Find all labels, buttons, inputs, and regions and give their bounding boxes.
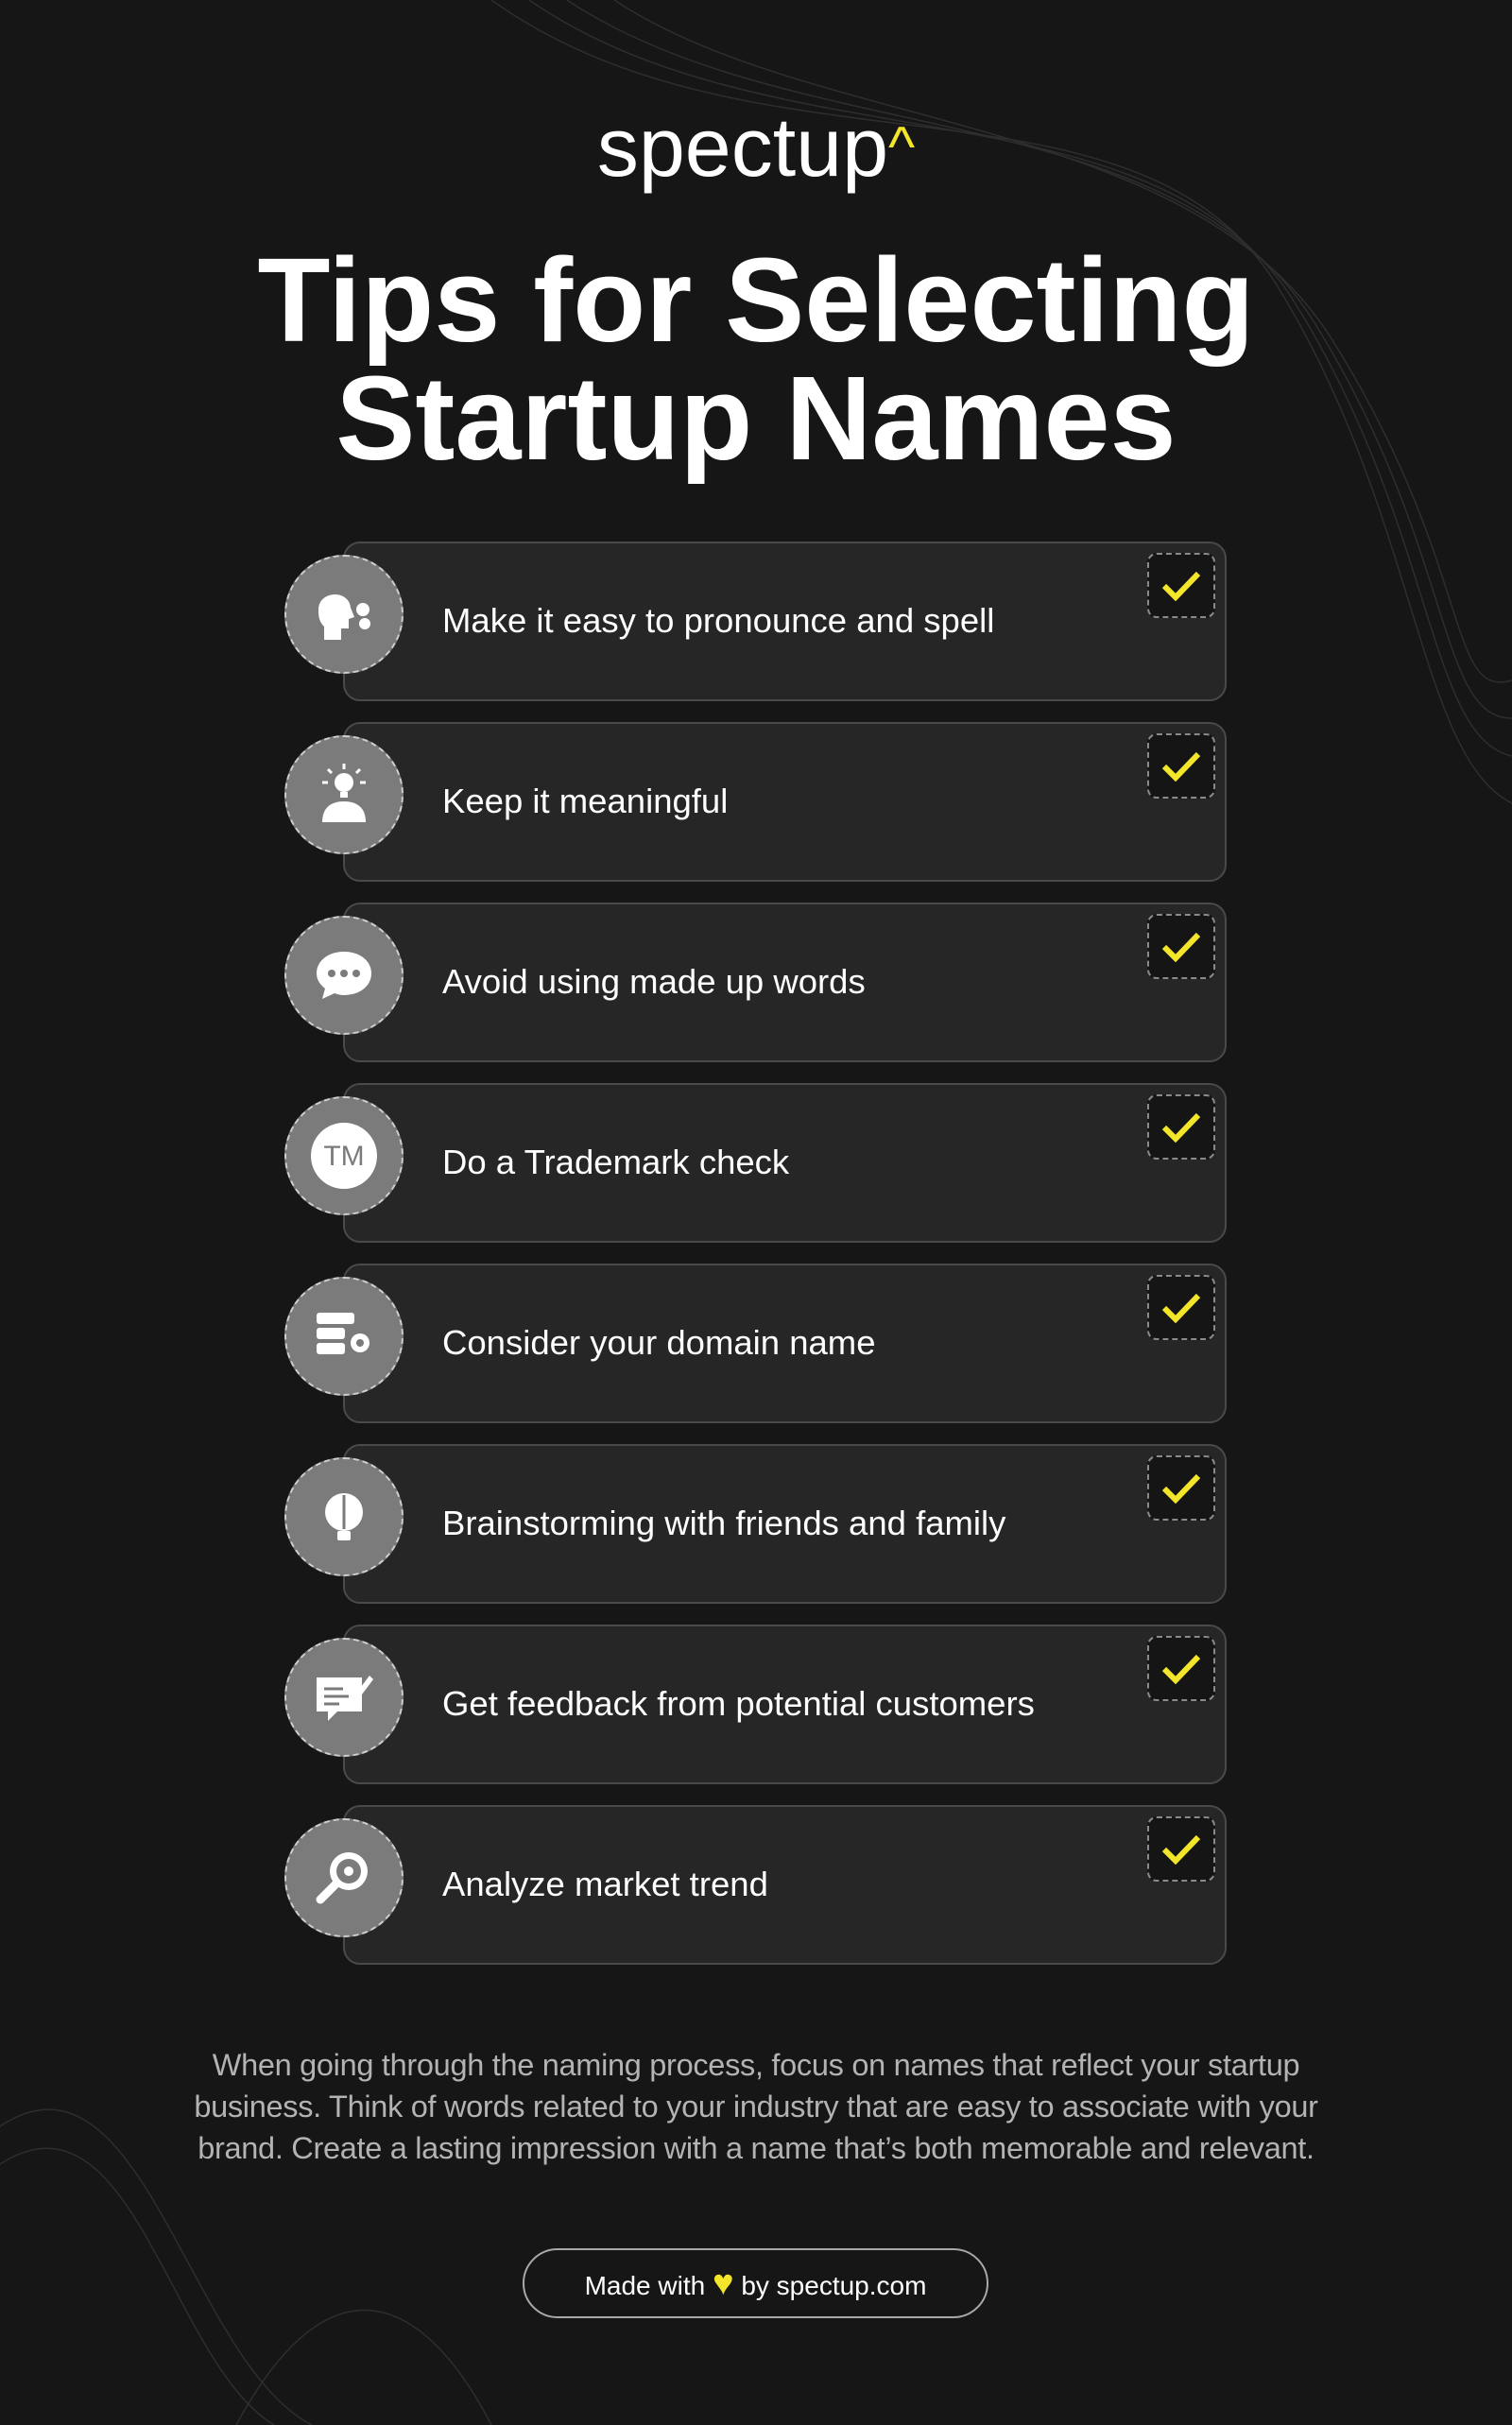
paragraph: business. Think of words related to your industry that are easy to associate with your <box>194 2090 1318 2124</box>
check 1 <box>1147 553 1215 618</box>
paragraph: brand. Create a lasting impression with a name that’s both memorable and relevant. <box>198 2131 1314 2165</box>
card: brainstorming <box>343 1444 1227 1604</box>
card: domain <box>343 1264 1227 1423</box>
check 2 <box>1147 733 1215 799</box>
icon: magnifier <box>284 1818 404 1937</box>
check 3 <box>1147 914 1215 979</box>
paragraph <box>194 2048 1318 2165</box>
card: market trend: Analyze market trend <box>442 1865 768 1903</box>
card: feedback: Get feedback from potential customers <box>442 1684 1035 1723</box>
footer button: Made with ♥ by spectup.com <box>585 2263 926 2303</box>
check 6 <box>1147 1455 1215 1521</box>
check 7 <box>1147 1636 1215 1701</box>
icon: speaking head <box>284 555 404 674</box>
title: Tips for Selecting <box>258 233 1254 367</box>
title <box>258 233 1254 485</box>
card: pronounce <box>343 542 1227 701</box>
icon: idea person <box>284 735 404 854</box>
icon: brain bulb <box>284 1457 404 1576</box>
card: feedback <box>343 1625 1227 1784</box>
icon: server gear <box>284 1277 404 1396</box>
card: trademark: Do a Trademark check <box>442 1143 789 1181</box>
card: domain: Consider your domain name <box>442 1323 876 1362</box>
card: made up words: Avoid using made up words <box>442 962 866 1001</box>
card: trademark <box>343 1083 1227 1243</box>
card: meaningful <box>343 722 1227 882</box>
icon: TM <box>284 1096 404 1215</box>
card: meaningful: Keep it meaningful <box>442 782 728 820</box>
paragraph: When going through the naming process, focus on names that reflect your startup <box>213 2048 1299 2082</box>
card: brainstorming: Brainstorming with friends and family <box>442 1504 1005 1542</box>
check 8 <box>1147 1816 1215 1882</box>
icon: chat bubble <box>284 916 404 1035</box>
icon: TM: TM <box>323 1141 365 1172</box>
card: market trend <box>343 1805 1227 1965</box>
check 4 <box>1147 1094 1215 1160</box>
card: made up words <box>343 903 1227 1062</box>
footer button <box>523 2248 988 2318</box>
logo: spectup^ <box>597 100 915 194</box>
icon: feedback form <box>284 1638 404 1757</box>
check 5 <box>1147 1275 1215 1340</box>
title: Startup Names <box>335 352 1177 485</box>
card: pronounce: Make it easy to pronounce and spell <box>442 601 994 640</box>
